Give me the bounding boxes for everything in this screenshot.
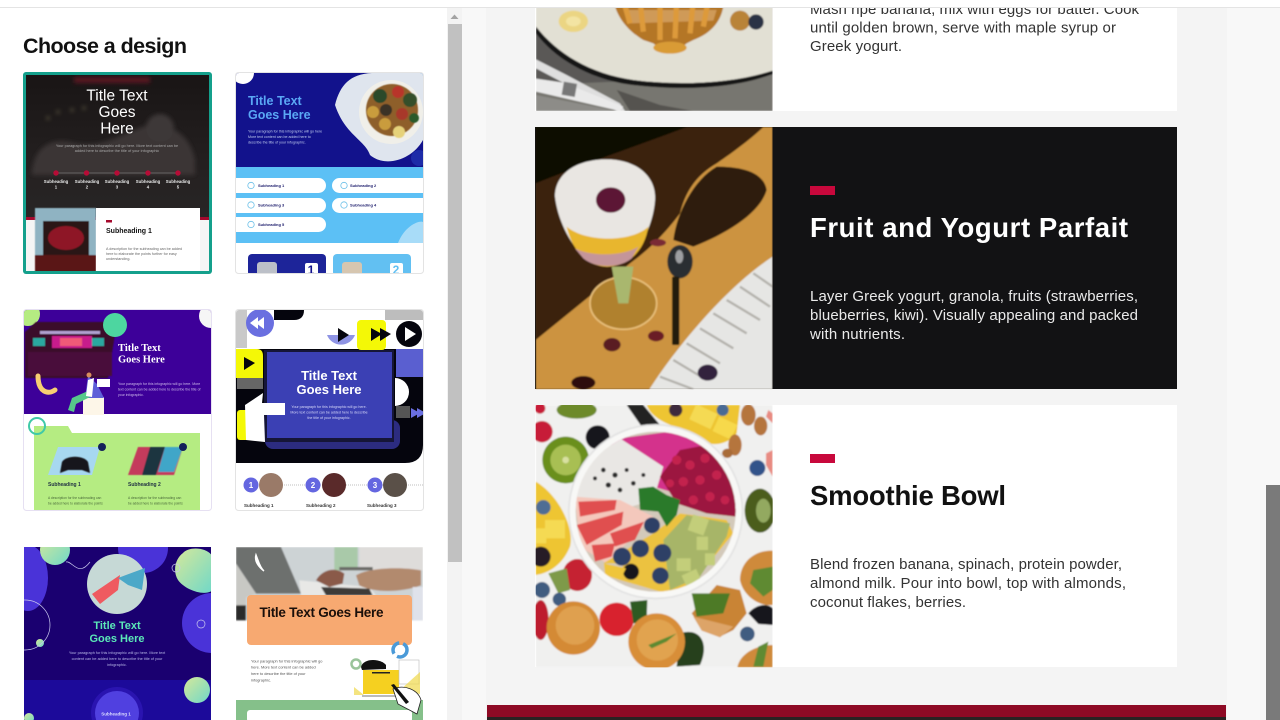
- description text: [809, 288, 1138, 343]
- thumbnail: dark film template: Subheading: [166, 179, 191, 184]
- thumbnail: yellow and black media template: Title Text: [301, 368, 358, 383]
- thumbnail: navy bubbles template: [24, 547, 211, 720]
- thumbnail: yellow and black media template: Your paragraph for this infographic will go here.: [291, 405, 367, 409]
- thumbnail: blue food template: describe the title of your infographic.: [248, 140, 306, 144]
- card: smoothie bowl: [531, 401, 1177, 670]
- accent bar: [810, 186, 835, 195]
- thumbnail: purple gaming template: A description for the subheading can: [128, 496, 182, 500]
- thumbnail: navy bubbles template: Subheading 1: [101, 712, 131, 716]
- thumbnail: orange laptop template: here. More text content can be added: [251, 664, 316, 670]
- thumbnail: navy bubbles template: infographic.: [107, 663, 127, 667]
- thumbnail: yellow and black media template: Subheading 3: [367, 503, 397, 508]
- photo: parfait glass: [536, 127, 773, 389]
- thumbnail: blue food template: 2: [393, 263, 400, 277]
- thumbnail: dark film template: Goes: [98, 104, 136, 121]
- thumbnail: navy bubbles template: content can be added here to describe the title of your: [72, 657, 163, 661]
- thumbnail: blue food template: Subheading 4: [350, 202, 377, 208]
- thumbnail: dark film template: 1: [55, 184, 58, 190]
- thumbnail: dark film template: A description for the subheading can be added: [106, 247, 182, 251]
- thumbnail: purple gaming template: be added here to elaborate the points: [128, 502, 183, 506]
- thumbnail: blue food template: Subheading 5: [258, 222, 285, 227]
- main content column background: [486, 0, 1227, 720]
- thumbnail: dark film template: 4: [147, 184, 150, 190]
- thumbnail: orange laptop template: Title Text Goes Here: [260, 605, 384, 620]
- photo: smoothie bowl and fruit: [531, 401, 775, 670]
- thumbnail: purple gaming template: Subheading 2: [128, 482, 161, 488]
- browser top strip: [0, 0, 1280, 8]
- thumbnail: yellow and black media template: 1: [249, 481, 254, 490]
- description text: [810, 556, 1126, 611]
- title: fruit and yogurt parfait: Fruit and Yogurt Parfait: [810, 212, 1128, 243]
- description text: Blend frozen banana, spinach, protein powder,: [810, 556, 1122, 573]
- description text: blueberries, kiwi). Visually appealing and packed: [810, 307, 1138, 324]
- thumbnail: dark film template: [23, 72, 212, 274]
- thumbnail: yellow and black media template: Goes Here: [296, 382, 362, 397]
- thumbnail: dark film template: 5: [177, 184, 180, 190]
- thumbnail: dark film template: Subheading 1: [106, 228, 152, 235]
- thumbnail: yellow and black media template: [236, 309, 426, 510]
- thumbnail: blue food template: 1: [308, 263, 315, 277]
- thumbnail: navy bubbles template: Title Text: [93, 620, 141, 632]
- card: pancake recipe: [535, 0, 1177, 111]
- thumbnail: dark film template: added here to describe the title of your infographic: [75, 149, 159, 153]
- thumbnail: dark film template: Here: [100, 120, 134, 138]
- thumbnail: purple gaming template: Your paragraph for this infographic will go here. More: [118, 382, 200, 386]
- thumbnail: yellow and black media template: 2: [311, 481, 316, 490]
- thumbnail: yellow and black media template: Subheading 1: [244, 503, 274, 508]
- thumbnail: orange laptop template: here to describe the title of your: [251, 671, 306, 676]
- main page scrollbar: [1266, 485, 1280, 720]
- thumbnail: purple gaming template: Subheading 1: [48, 482, 81, 488]
- photo: banana pancakes: [536, 0, 773, 111]
- thumbnail: purple gaming template: A description for the subheading can: [48, 496, 102, 500]
- title: smoothie bowl: Smoothie Bowl: [810, 480, 1006, 511]
- thumbnail: navy bubbles template: Your paragraph for this infographic will go here. More text: [69, 651, 166, 655]
- description text: Layer Greek yogurt, granola, fruits (strawberries,: [810, 288, 1138, 305]
- thumbnail: blue food template: Subheading 1: [258, 183, 285, 188]
- recipe text: Mash ripe banana, mix with eggs for batter. Cook: [810, 1, 1140, 18]
- thumbnail: dark film template: understanding.: [106, 257, 130, 261]
- recipe text: [810, 1, 1140, 55]
- thumbnail: purple gaming template: text content can be added here to describe the title of: [118, 388, 201, 392]
- description text: coconut flakes, berries.: [810, 594, 966, 611]
- thumbnail: yellow and black media template: More text content can be added here to describe: [290, 410, 368, 414]
- thumbnail: yellow and black media template: Subheading 2: [306, 503, 336, 508]
- next section banner: [487, 705, 1226, 720]
- thumbnail: blue food template: [235, 72, 424, 274]
- thumbnail: yellow and black media template: 3: [373, 481, 378, 490]
- thumbnail: dark film template: Subheading: [105, 179, 130, 184]
- thumbnail: dark film template: Your paragraph for this infographic will go here. More text content can be: [56, 144, 178, 148]
- thumbnail: purple gaming template: your infographic.: [118, 393, 144, 397]
- accent bar: [810, 454, 835, 463]
- thumbnail: dark film template: Title Text: [86, 88, 148, 104]
- description text: almond milk. Pour into bowl, top with almonds,: [810, 575, 1126, 592]
- thumbnail: purple gaming template: Goes Here: [118, 354, 165, 366]
- left panel scrollbar: [447, 8, 462, 720]
- recipe text: until golden brown, serve with maple syrup or: [810, 20, 1116, 36]
- thumbnail: purple gaming template: Title Text: [118, 343, 161, 354]
- thumbnail: blue food template: Subheading 3: [258, 202, 285, 208]
- thumbnail: purple gaming template: [23, 309, 212, 511]
- description text: with nutrients.: [809, 326, 905, 343]
- panel: design chooser: [0, 34, 432, 720]
- card: fruit and yogurt parfait: [535, 127, 1177, 389]
- thumbnail: blue food template: Subheading 2: [350, 183, 377, 188]
- left panel background: [0, 0, 447, 720]
- thumbnail: dark film template: 3: [116, 184, 119, 190]
- thumbnail: blue food template: Goes Here: [248, 108, 311, 122]
- thumbnail: navy bubbles template: Goes Here: [89, 633, 145, 645]
- thumbnail: orange laptop template: infographic.: [251, 678, 271, 682]
- thumbnail: dark film template: Subheading: [44, 179, 69, 184]
- thumbnail: yellow and black media template: the title of your infographic.: [307, 416, 351, 420]
- stock photo: hands and laptop: [236, 547, 423, 620]
- thumbnail: blue food template: Title Text: [248, 94, 303, 108]
- thumbnail: orange laptop template: Your paragraph for this infographic will go: [251, 658, 322, 664]
- thumbnail: dark film template: Subheading: [75, 179, 100, 184]
- thumbnail: purple gaming template: be added here to elaborate the points: [48, 502, 103, 506]
- thumbnail: dark film template: here to elaborate the points further for easy: [106, 252, 177, 256]
- heading: choose a design: Choose a design: [23, 34, 187, 58]
- thumbnail: orange laptop template: [236, 547, 423, 720]
- recipe text: Greek yogurt.: [810, 38, 902, 55]
- thumbnail: blue food template: Your paragraph for this infographic will go here: [248, 130, 322, 134]
- thumbnail: dark film template: 2: [86, 184, 89, 190]
- thumbnail: dark film template: Subheading: [136, 179, 161, 184]
- thumbnail: blue food template: More text content can be added here to: [248, 135, 311, 139]
